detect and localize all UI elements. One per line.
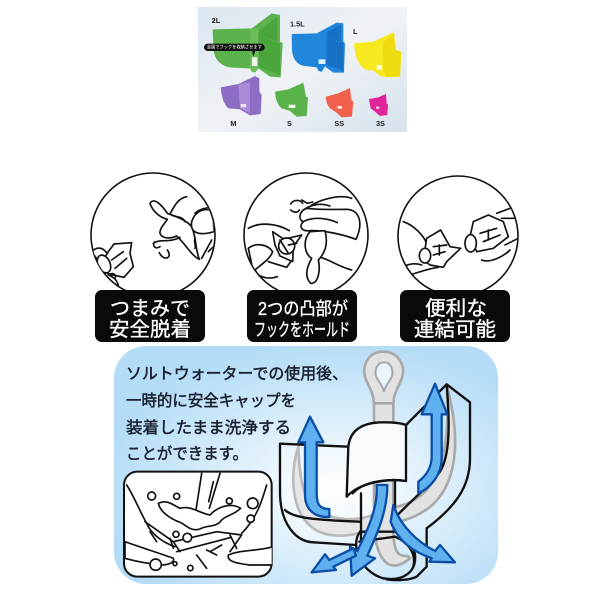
size labels bbox=[212, 16, 385, 128]
text block: washing note: ソルトウォーターでの使用後、 bbox=[126, 365, 348, 383]
product: M purple cap bbox=[221, 76, 262, 115]
product: SS red cap bbox=[326, 88, 353, 117]
size labels: L bbox=[353, 27, 358, 36]
safety cap outline back bbox=[280, 384, 470, 545]
product: 1.5L blue cap bbox=[292, 23, 345, 73]
size labels: 3S bbox=[376, 119, 385, 128]
illustration: cap holding hook bbox=[248, 197, 360, 283]
product: S green cap bbox=[275, 83, 308, 117]
text block: washing note: ことができます。 bbox=[126, 445, 248, 463]
label: feature 1: 安全脱着 bbox=[109, 318, 191, 341]
text block: washing note bbox=[126, 365, 348, 463]
label: feature 3 bbox=[400, 290, 510, 342]
size labels: M bbox=[230, 119, 236, 128]
label: feature 3: 連結可能 bbox=[414, 318, 496, 341]
label: feature 2: 2つの凸部が bbox=[258, 299, 348, 319]
size labels: 1.5L bbox=[290, 19, 305, 28]
illustration: two linked caps bbox=[403, 208, 518, 275]
water arrows bbox=[298, 384, 455, 576]
panel: feature 2 circle bbox=[244, 173, 368, 297]
label: feature 2: フックをホールド bbox=[254, 320, 350, 340]
label: feature 1 bbox=[95, 290, 205, 342]
product: 3S magenta cap bbox=[369, 94, 388, 116]
hook bbox=[293, 352, 455, 566]
label: feature 1: つまみで bbox=[110, 298, 190, 320]
label: feature 3: 便利な bbox=[425, 297, 487, 320]
size labels: 2L bbox=[212, 16, 221, 25]
product: L yellow cap bbox=[354, 32, 401, 77]
panel: feature 1 circle bbox=[91, 173, 215, 297]
product: 2L green cap bbox=[213, 13, 283, 77]
panel: size lineup photo bbox=[198, 7, 407, 132]
safety cap center band bbox=[347, 422, 427, 580]
callout: hook note: 金属でフックを収納させます bbox=[207, 44, 262, 51]
text block: washing note: 装着したまま洗浄する bbox=[126, 419, 291, 437]
label: feature 2 bbox=[247, 290, 357, 342]
illustration: hook in safety cap with water flow bbox=[280, 352, 470, 580]
panel: feature 3 circle bbox=[398, 176, 518, 296]
panel: washing explanation bbox=[114, 346, 498, 584]
text block: washing note: 一時的に安全キャップを bbox=[126, 392, 296, 410]
callout: hook note bbox=[204, 44, 265, 57]
size labels: S bbox=[287, 119, 292, 128]
illustration: hand pinching cap tab bbox=[92, 197, 214, 285]
illustration: rinsing in hands bbox=[124, 472, 273, 577]
size labels: SS bbox=[334, 119, 344, 128]
